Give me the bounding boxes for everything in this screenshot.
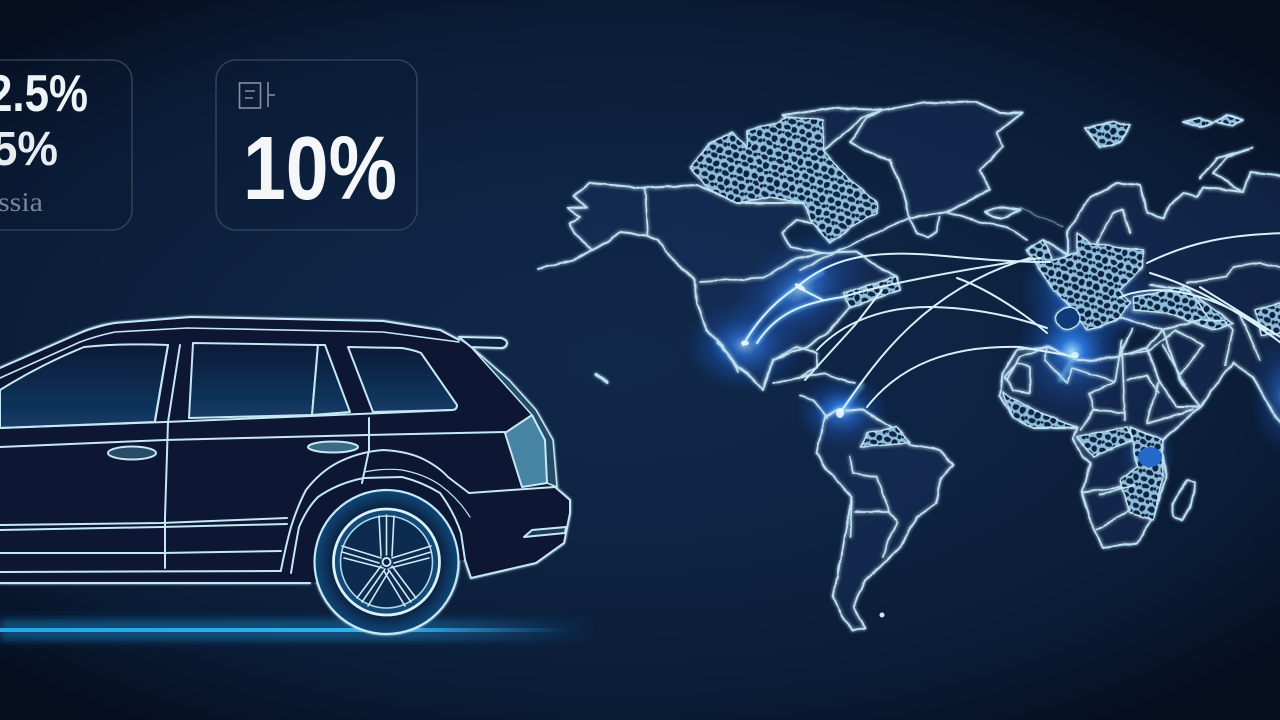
- side windows: [0, 344, 168, 428]
- bumper: [465, 487, 570, 578]
- panel: right statistics card: [216, 60, 417, 230]
- Arctic islands: [1183, 115, 1243, 127]
- cell-patterned regions: [690, 117, 1280, 520]
- Madagascar: [1173, 480, 1195, 520]
- window frame line: [0, 410, 452, 428]
- panel: left statistics card: [0, 60, 132, 230]
- car line drawing: [0, 317, 570, 634]
- car body: [0, 317, 570, 583]
- Middle East: [1133, 287, 1233, 330]
- roof outline: [0, 317, 459, 368]
- country borders: [645, 188, 1280, 557]
- Europe: [1027, 233, 1143, 330]
- rear spoiler: [459, 337, 507, 348]
- floor light beam: [0, 619, 600, 641]
- Central Africa: [1077, 427, 1133, 457]
- West Africa: [1003, 393, 1077, 428]
- Eurasia: [1027, 172, 1280, 440]
- North America: [567, 183, 900, 390]
- wheel hub: [382, 558, 390, 566]
- Northern South America: [860, 427, 910, 447]
- Iceland: [985, 207, 1020, 218]
- belt line: [0, 432, 505, 447]
- map glow spots: [685, 203, 1280, 487]
- Ellesmere ridge: [783, 108, 883, 150]
- Aleutian chain: [538, 250, 593, 269]
- door edge: [165, 422, 168, 568]
- bumper vent: [524, 527, 566, 537]
- Mediterranean basin: [1056, 307, 1080, 329]
- Canadian archipelago: [690, 117, 877, 243]
- roof rail: [0, 328, 459, 378]
- Falkland dot: [880, 612, 884, 618]
- wheel: [314, 490, 458, 634]
- flight routes: [743, 233, 1280, 413]
- land masses: [538, 102, 1280, 630]
- door handle front: [108, 446, 156, 460]
- Greenland: [850, 102, 1022, 218]
- US east coast: [843, 277, 900, 307]
- wheel spokes: [342, 515, 431, 606]
- icon: document glyph: [240, 82, 275, 108]
- map lines: [538, 102, 1280, 630]
- Africa: [1000, 347, 1200, 548]
- Novaya Zemlya: [1200, 148, 1252, 190]
- route halo: [743, 272, 1075, 413]
- pillars: [155, 345, 369, 483]
- world map: [538, 102, 1280, 630]
- tail light: [505, 415, 547, 487]
- sill lines: [0, 518, 310, 583]
- stat: 10 percent: 10%: [243, 119, 397, 219]
- wheel arch: [281, 450, 469, 570]
- rear glass: [471, 347, 557, 487]
- Svalbard: [1085, 122, 1130, 148]
- Hawaii: [596, 374, 607, 382]
- door handle rear: [308, 442, 358, 452]
- South America: [817, 410, 953, 630]
- Black Sea shore: [1255, 300, 1280, 335]
- East Africa: [1120, 427, 1163, 520]
- Lake region highlight: [1138, 447, 1162, 467]
- glow hot spots: [741, 282, 1079, 418]
